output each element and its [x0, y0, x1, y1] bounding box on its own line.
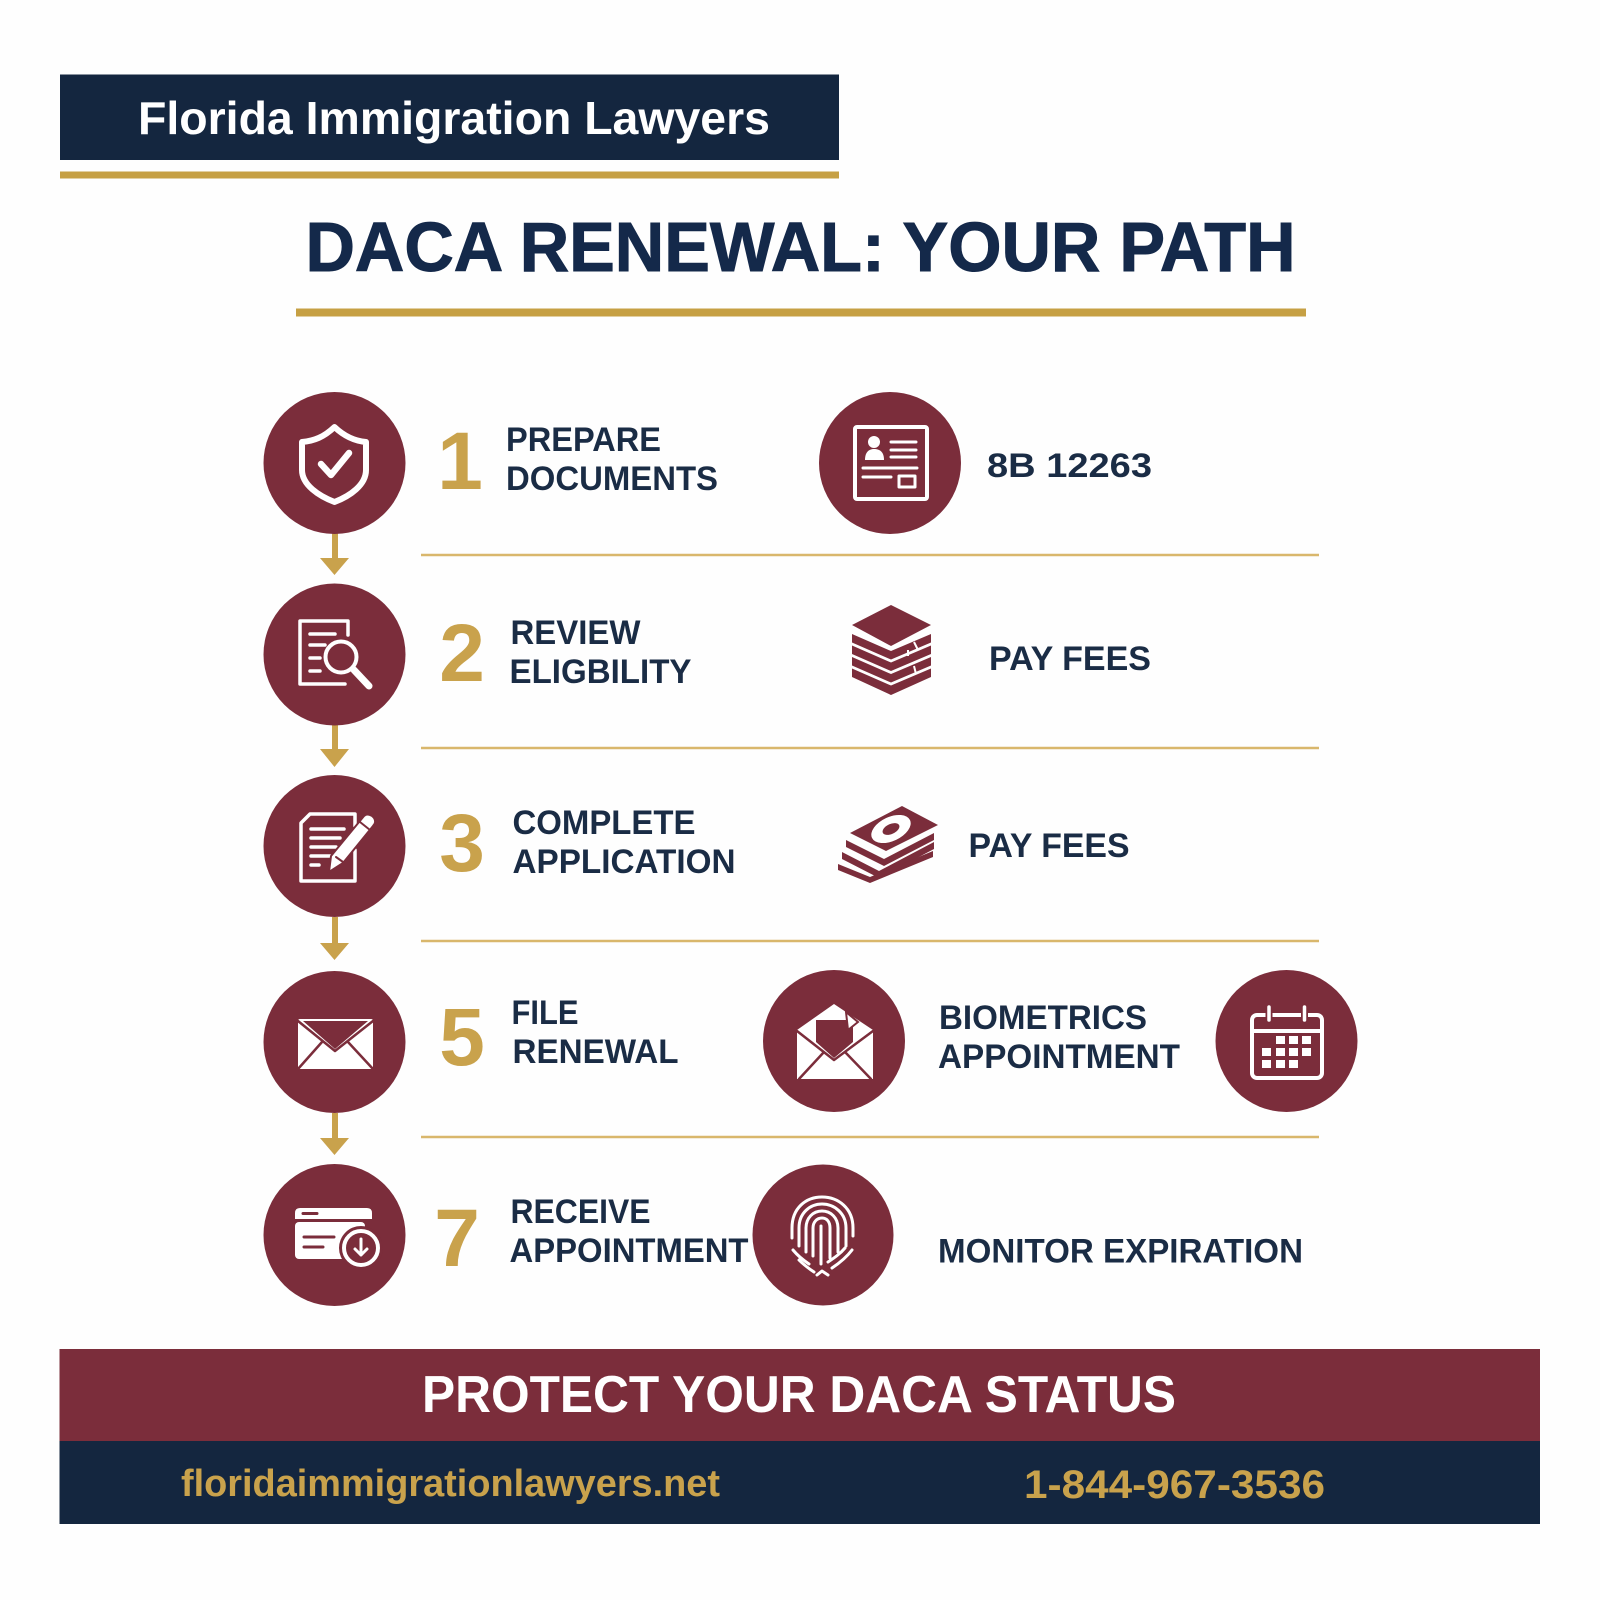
row 3 [264, 775, 1130, 917]
icon: ID card [819, 392, 961, 534]
value: 8B 12263: 8B 12263 [987, 447, 1152, 485]
label: monitor expiration: MONITOR EXPIRATION [938, 1232, 1303, 1270]
step number 1: 1 [437, 416, 483, 507]
step number 3: 3 [439, 798, 485, 889]
arrow: step 3 to 4 [320, 917, 349, 960]
icon: stack of books [852, 605, 931, 695]
icon: open envelope [763, 970, 905, 1112]
step label: file renewal: RENEWAL [512, 1033, 678, 1071]
arrow: step 1 to 2 [320, 533, 349, 575]
label: biometrics appointment: BIOMETRICS [939, 999, 1147, 1037]
label: pay fees: PAY FEES [989, 640, 1151, 678]
footer contact band: floridaimmigrationlawyers.net [181, 1463, 720, 1505]
icon: application and pen [264, 775, 406, 917]
header banner: Florida Immigration Lawyers [138, 92, 770, 144]
label: biometrics appointment: APPOINTMENT [938, 1038, 1180, 1076]
icon: envelope [264, 971, 406, 1113]
step label: prepare documents: PREPARE [506, 421, 661, 459]
arrow: step 4 to 5 [320, 1113, 349, 1155]
label: pay fees: PAY FEES [968, 827, 1130, 865]
step label: file renewal: FILE [512, 994, 578, 1032]
row 4 [264, 970, 1358, 1113]
footer contact band [60, 1441, 1540, 1524]
step number 7: 7 [434, 1193, 480, 1284]
title: DACA RENEWAL: YOUR PATH [306, 208, 1296, 286]
icon: calendar [1216, 970, 1358, 1112]
icon: review document [264, 584, 406, 726]
icon: card with download [264, 1164, 406, 1306]
step label: review eligibility [510, 614, 692, 691]
label: biometrics appointment [938, 999, 1180, 1076]
row 1 [264, 392, 1152, 534]
row 2 [264, 584, 1151, 726]
header banner [60, 74, 839, 178]
step label: prepare documents: DOCUMENTS [506, 460, 718, 498]
footer contact band: 1-844-967-3536 [1024, 1463, 1325, 1507]
icon: fingerprint [752, 1164, 894, 1306]
icon: shield check [264, 392, 406, 534]
step label: receive appointment: RECEIVE [510, 1193, 650, 1231]
step label: review eligibility: REVIEW [510, 614, 641, 652]
step label: complete application: APPLICATION [512, 843, 736, 881]
step label: prepare documents [506, 421, 718, 498]
step number 5: 5 [439, 992, 485, 1083]
arrow: step 2 to 3 [320, 725, 349, 767]
step label: file renewal [512, 994, 678, 1071]
icon: money stack [838, 806, 938, 883]
step label: review eligibility: ELIGBILITY [510, 653, 692, 691]
footer call to action band [60, 1349, 1540, 1441]
step number 2: 2 [439, 608, 485, 699]
step label: receive appointment [510, 1193, 749, 1270]
footer call to action band: PROTECT YOUR DACA STATUS [422, 1366, 1176, 1424]
row 5 [264, 1164, 1303, 1306]
step label: complete application: COMPLETE [512, 804, 696, 842]
step label: complete application [512, 804, 736, 881]
step label: receive appointment: APPOINTMENT [510, 1232, 749, 1270]
